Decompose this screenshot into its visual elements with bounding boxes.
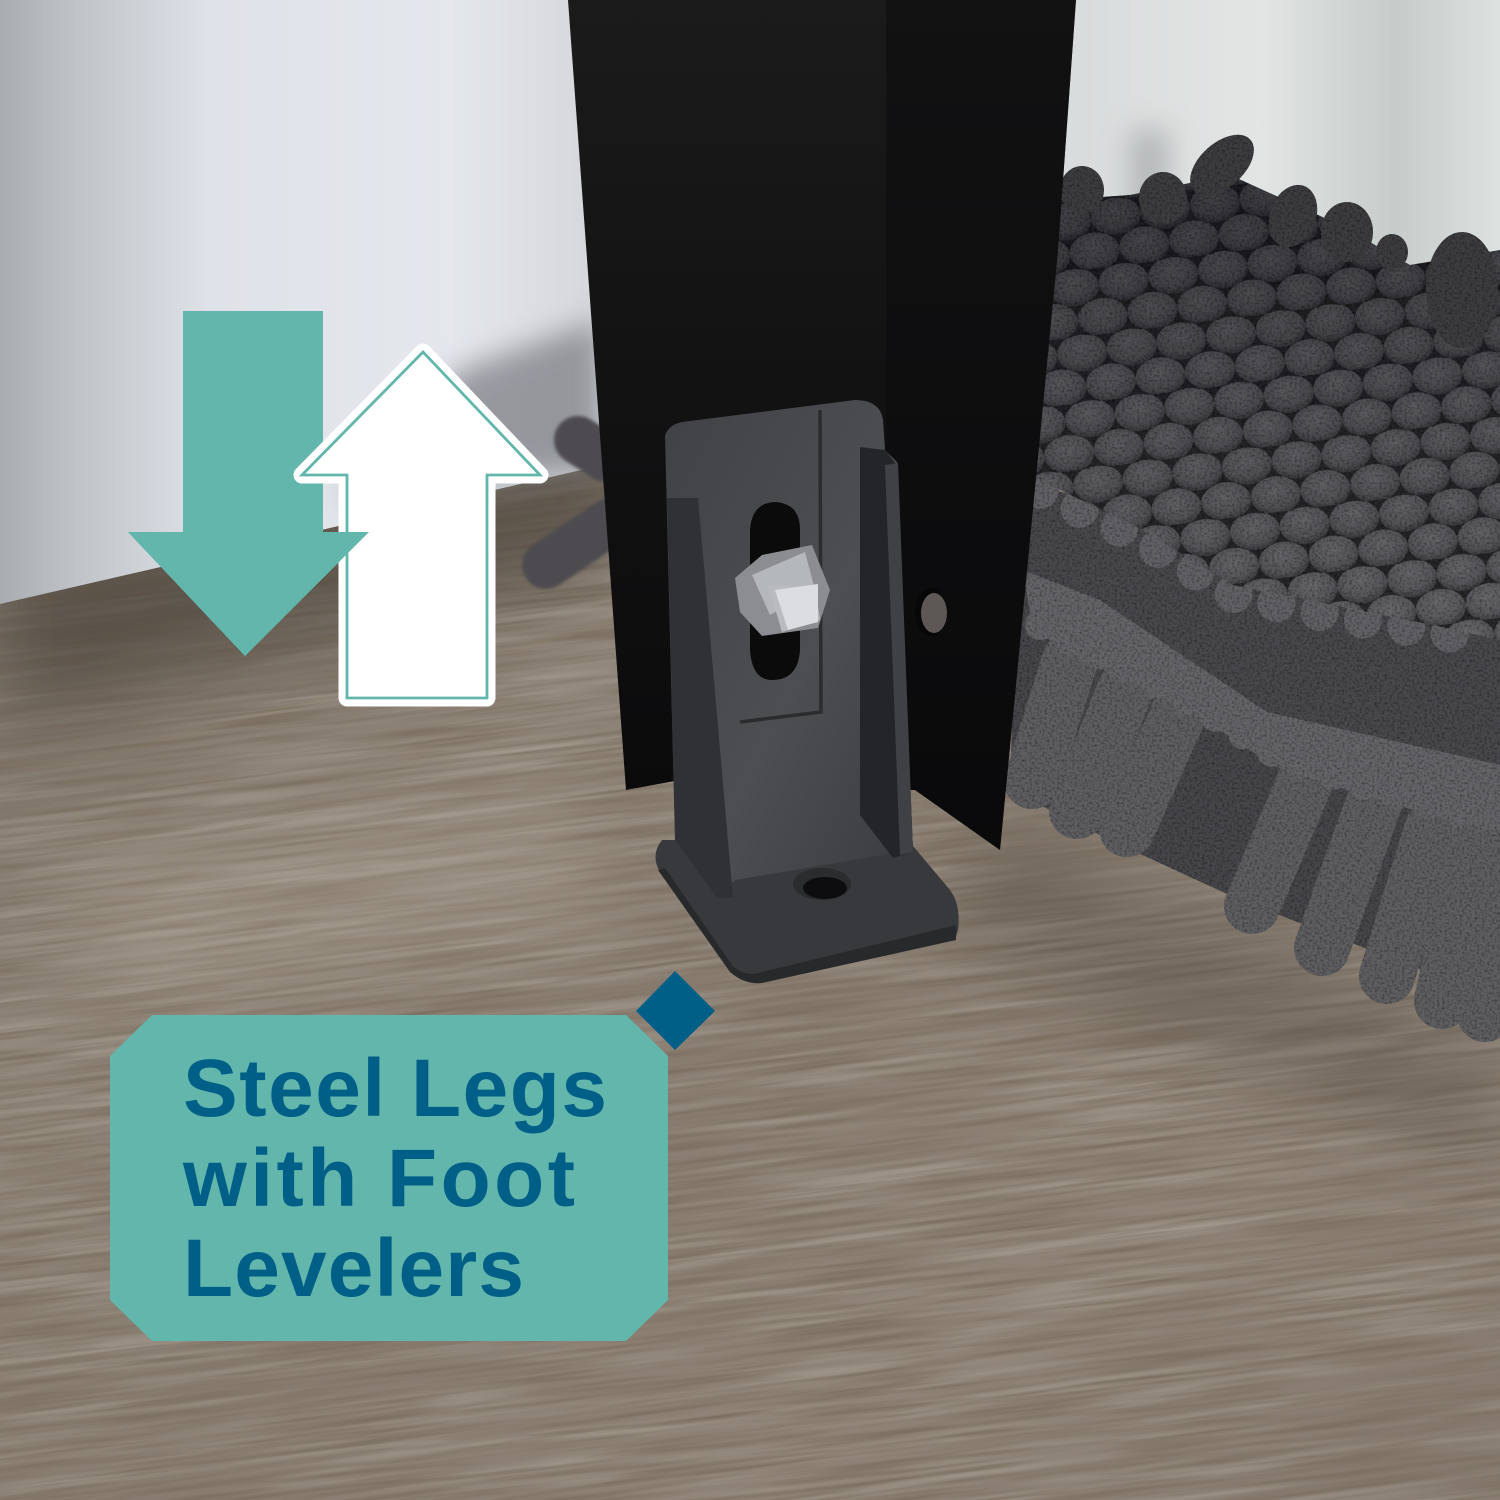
background: wood floor bbox=[0, 400, 1500, 1500]
plastic foot leveler bbox=[655, 400, 959, 983]
chenille mat bbox=[546, 123, 1500, 1014]
mat ruffle lower layer bbox=[1023, 570, 1500, 833]
leg side hole bbox=[915, 588, 947, 636]
mat tassels left of the leg bbox=[546, 440, 610, 565]
callout text: Steel Legs bbox=[183, 1043, 607, 1134]
leg fold shading bbox=[886, 0, 1076, 850]
background: white wall bbox=[0, 0, 1500, 604]
foot screw hole bbox=[793, 868, 851, 900]
black steel leg bbox=[568, 0, 1076, 850]
icon: teal down arrow bbox=[128, 311, 369, 656]
mat bobble pile bbox=[1035, 123, 1500, 640]
mat lower ridges bbox=[1032, 660, 1497, 1014]
callout text: with Foot bbox=[182, 1133, 575, 1224]
icon: teal arrow head over white arrow bbox=[128, 532, 369, 656]
foot upright bracket bbox=[665, 400, 913, 898]
callout: steel legs label bbox=[110, 1015, 668, 1341]
foot base plate bbox=[655, 827, 959, 982]
foot adjustment slot bbox=[750, 502, 800, 680]
mat ruffle upper layer bbox=[1030, 486, 1500, 765]
icon: white up arrow bbox=[302, 352, 540, 698]
callout text: Levelers bbox=[183, 1223, 524, 1314]
mat backing under ruffles and ridges bbox=[1010, 480, 1500, 1000]
silver hex bolt bbox=[735, 545, 830, 636]
callout pointer: blue diamond bbox=[636, 971, 715, 1050]
